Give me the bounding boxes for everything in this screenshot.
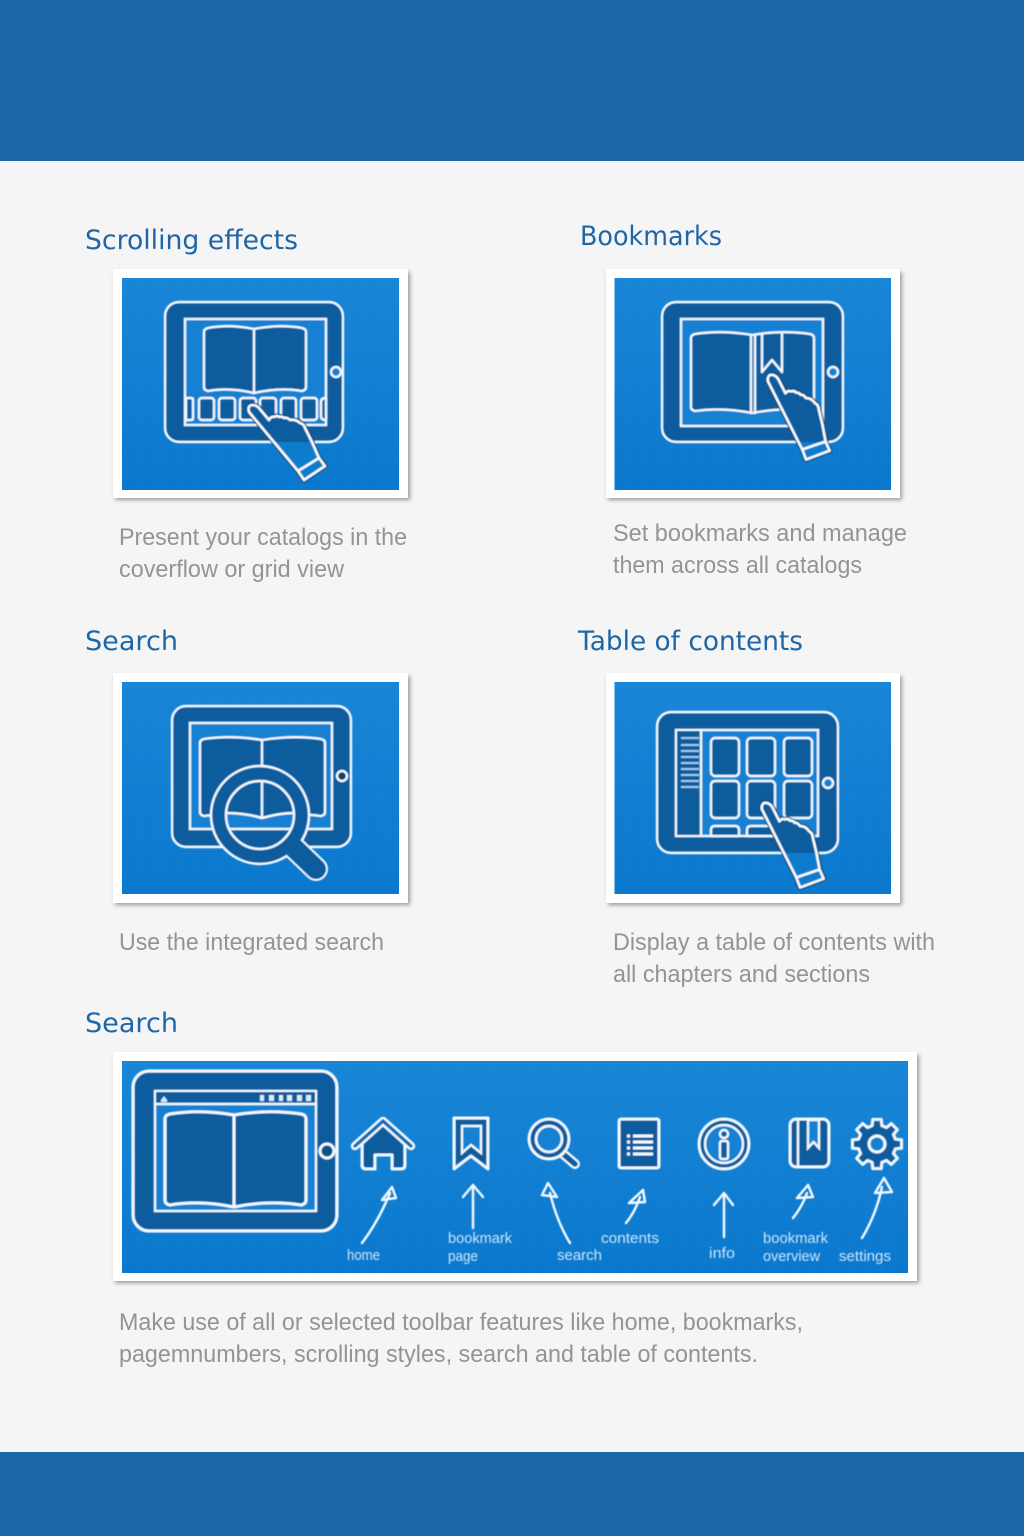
header band: [0, 0, 1024, 161]
text: bookmarks description: them across all catalogs: [613, 552, 862, 579]
label: bookmark page: page: [448, 1248, 478, 1265]
arrow: bookmark overview: [793, 1185, 813, 1218]
label: bookmark page: [448, 1230, 512, 1265]
text: scrolling effects description: Present your catalogs in the: [119, 524, 407, 551]
label: bookmark page: bookmark: [448, 1230, 512, 1247]
label: search: search: [557, 1247, 602, 1264]
panel: scrolling effects illustration: [113, 269, 410, 500]
heading: Search: Search: [85, 626, 178, 657]
text: toolbar description: [119, 1309, 803, 1368]
arrow: home: [362, 1187, 396, 1243]
label: info: info: [709, 1245, 735, 1262]
icon: settings: [852, 1119, 902, 1169]
icon: tablet with open book: [133, 1071, 337, 1231]
text: scrolling effects description: coverflow or grid view: [119, 556, 344, 583]
label: bookmark overview: [763, 1230, 828, 1265]
text: bookmarks description: Set bookmarks and manage: [613, 520, 907, 547]
panel: search illustration: [113, 673, 410, 905]
heading: Search toolbar: Search: [85, 1008, 178, 1039]
text: toolbar description: Make use of all or selected toolbar features like home, bookmarks,: [119, 1309, 803, 1336]
panel: bookmarks illustration: [606, 269, 902, 500]
icon: bookmark overview: [790, 1119, 829, 1167]
label: settings: settings: [839, 1248, 891, 1265]
heading: Bookmarks: Bookmarks: [580, 221, 722, 252]
text: table of contents description: all chapters and sections: [613, 961, 870, 988]
text: search description: Use the integrated search: [119, 929, 384, 956]
text: bookmarks description: [613, 520, 907, 579]
arrow: info: [714, 1193, 733, 1237]
label: bookmark overview: overview: [763, 1248, 820, 1265]
text: scrolling effects description: [119, 524, 407, 583]
arrow: settings: [862, 1178, 892, 1238]
icon: info: [699, 1119, 749, 1169]
icon: search: [529, 1119, 575, 1164]
heading: Scrolling effects: Scrolling effects: [85, 225, 298, 256]
icon: bookmark: [454, 1118, 488, 1169]
arrow: search: [542, 1183, 570, 1243]
footer band: [0, 1452, 1024, 1536]
label: bookmark overview: bookmark: [763, 1230, 828, 1247]
icon: home: [355, 1121, 411, 1169]
text: table of contents description: [613, 929, 935, 988]
arrow: bookmark page: [463, 1185, 483, 1228]
text: table of contents description: Display a table of contents with: [613, 929, 935, 956]
text: toolbar description: pagemnumbers, scrolling styles, search and table of contents.: [119, 1341, 758, 1368]
icon: contents: [619, 1119, 659, 1168]
label: contents: contents: [601, 1230, 659, 1247]
panel: toolbar illustration: [113, 1052, 919, 1283]
label: home: home: [347, 1247, 380, 1264]
arrow: contents: [626, 1190, 645, 1223]
heading: Table of contents: Table of contents: [577, 626, 803, 657]
panel: table of contents illustration: [606, 673, 902, 905]
